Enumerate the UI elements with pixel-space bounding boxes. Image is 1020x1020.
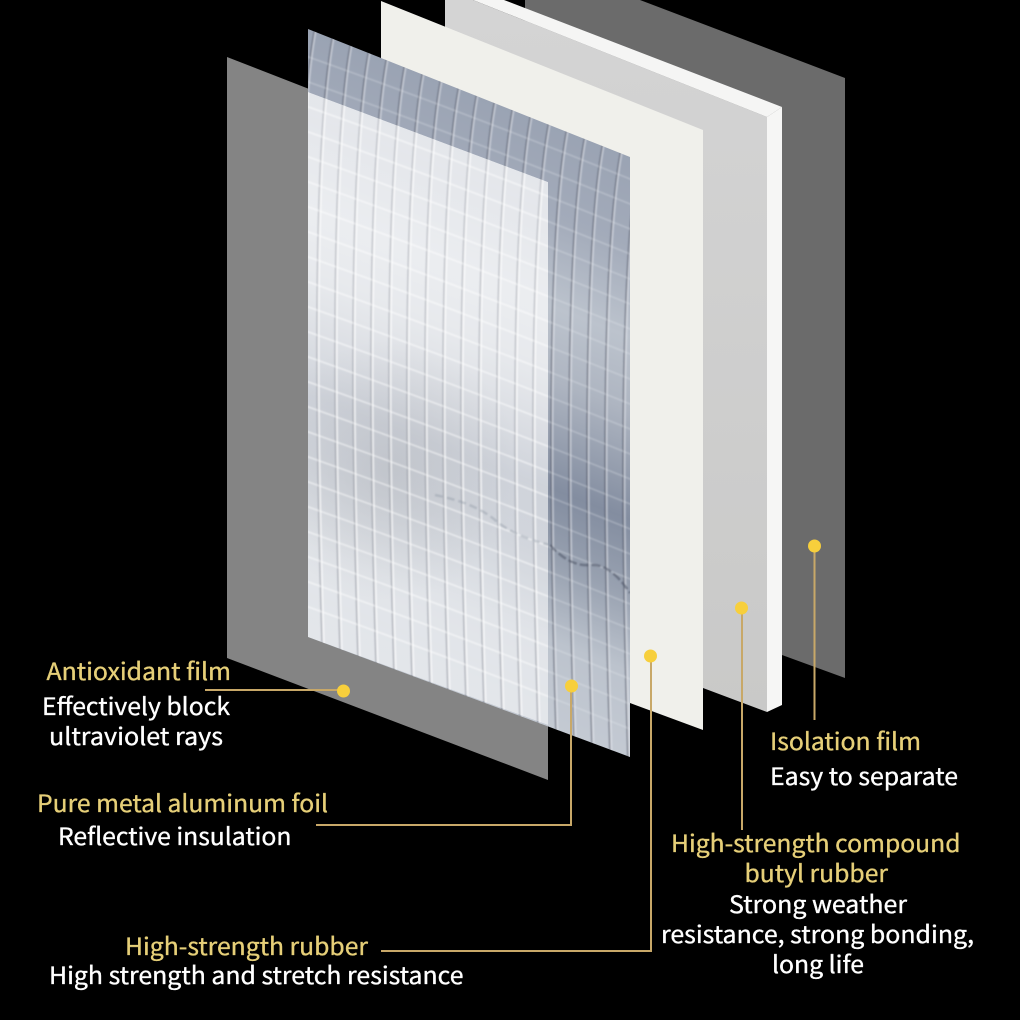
layer: high-strength rubber — [381, 1, 703, 730]
layer: isolation film — [525, 0, 845, 678]
leader: antioxidant film — [205, 684, 350, 698]
label: high-strength compound butyl rubber: butyl rubber — [744, 854, 889, 889]
label: antioxidant film: ultraviolet rays — [49, 717, 223, 752]
label: high-strength rubber — [49, 927, 463, 991]
label: high-strength compound butyl rubber: long life — [772, 945, 864, 980]
label: high-strength rubber: High-strength rubber — [125, 927, 369, 962]
label: pure metal aluminum foil: Pure metal aluminum foil — [37, 784, 328, 819]
layer: antioxidant film over foil — [308, 92, 548, 725]
label: isolation film — [770, 722, 958, 792]
label: pure metal aluminum foil — [37, 784, 328, 852]
layer: aluminum foil — [299, 20, 642, 776]
leader: high-strength rubber — [381, 650, 657, 951]
label: isolation film: Easy to separate — [770, 757, 958, 792]
label: pure metal aluminum foil: Reflective insulation — [58, 817, 292, 852]
label: high-strength compound butyl rubber: High-strength compound — [671, 824, 960, 859]
label: antioxidant film: Effectively block — [42, 687, 230, 722]
label: isolation film: Isolation film — [770, 722, 921, 757]
label: high-strength compound butyl rubber: Strong weather — [729, 885, 908, 920]
leader: compound butyl rubber — [735, 602, 748, 830]
label: antioxidant film: Antioxidant film — [46, 652, 231, 687]
layer: antioxidant film back portion — [227, 57, 548, 780]
label: high-strength compound butyl rubber: resistance, strong bonding, — [661, 915, 974, 950]
layer: compound butyl rubber board — [445, 0, 782, 712]
label: antioxidant film — [42, 652, 231, 752]
leader: isolation film — [808, 540, 821, 720]
label: high-strength compound butyl rubber — [661, 824, 974, 980]
label: high-strength rubber: High strength and stretch resistance — [49, 956, 463, 991]
leader: aluminum foil — [316, 680, 578, 825]
